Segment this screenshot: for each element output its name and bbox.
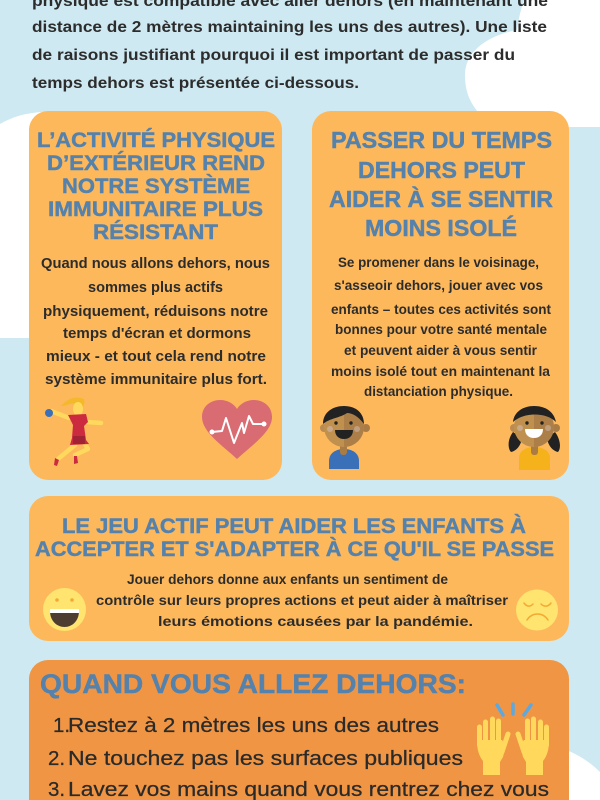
intro text: de raisons justifiant pourquoi il est important de passer du bbox=[32, 47, 515, 64]
heading: less isolated bbox=[329, 127, 553, 241]
intro text: temps dehors est présentée ci-dessous. bbox=[32, 75, 359, 92]
text: less isolated bbox=[331, 255, 551, 399]
panel: physical activity bbox=[29, 111, 282, 480]
list: outdoor rules: 1. bbox=[53, 714, 70, 737]
heading: physical activity bbox=[37, 127, 275, 244]
icon: raised hands bbox=[477, 704, 549, 775]
list: outdoor rules: 2. bbox=[48, 747, 65, 770]
heading: physical activity: NOTRE SYSTÈME bbox=[62, 173, 250, 198]
panel: less isolated bbox=[312, 111, 569, 480]
heading: active play: LE JEU ACTIF PEUT AIDER LES ENFANTS À bbox=[62, 515, 526, 538]
panel: active play bbox=[29, 496, 569, 641]
icon: handball player bbox=[45, 398, 101, 466]
intro text bbox=[32, 0, 548, 92]
heading: when you go outside: QUAND VOUS ALLEZ DEHORS: bbox=[40, 669, 466, 699]
text: physical activity: mieux - et tout cela rend notre bbox=[46, 349, 266, 365]
heading: active play bbox=[35, 515, 554, 561]
text: physical activity: temps d'écran et dormons bbox=[63, 326, 251, 342]
list: outdoor rules: Restez à 2 mètres les uns des autres bbox=[68, 714, 439, 737]
heading: physical activity: L’ACTIVITÉ PHYSIQUE bbox=[37, 127, 275, 152]
white blob: bottom right bbox=[560, 748, 600, 800]
white blob: left bbox=[0, 112, 42, 338]
heading: less isolated: PASSER DU TEMPS bbox=[331, 127, 552, 153]
list: outdoor rules: Ne touchez pas les surfaces publiques bbox=[68, 747, 463, 770]
icon: smiling face bbox=[43, 588, 86, 631]
white blob: top right bbox=[465, 0, 600, 127]
text: active play bbox=[96, 572, 509, 629]
heading: less isolated: AIDER À SE SENTIR bbox=[329, 185, 553, 212]
icon: heart with pulse bbox=[202, 400, 272, 459]
list: outdoor rules bbox=[48, 714, 549, 800]
heading: physical activity: RÉSISTANT bbox=[93, 219, 218, 244]
heading: physical activity: IMMUNITAIRE PLUS bbox=[48, 197, 263, 221]
text: active play: contrôle sur leurs propres actions et peut aider à maîtriser bbox=[96, 593, 509, 608]
heading: physical activity: D’EXTÉRIEUR REND bbox=[47, 150, 265, 175]
intro text: distance de 2 mètres maintaining les uns des autres). Une liste bbox=[32, 19, 547, 36]
text: physical activity: système immunitaire plus fort. bbox=[45, 372, 267, 388]
text: less isolated: distanciation physique. bbox=[364, 384, 513, 399]
heading: active play: ACCEPTER ET S'ADAPTER À CE QU'IL SE PASSE bbox=[35, 538, 554, 561]
icon: boy bbox=[320, 406, 370, 469]
text: less isolated: Se promener dans le voisinage, bbox=[338, 255, 539, 270]
heading: less isolated: MOINS ISOLÉ bbox=[365, 214, 517, 241]
text: physical activity: sommes plus actifs bbox=[88, 280, 223, 296]
text: active play: leurs émotions causées par la pandémie. bbox=[158, 614, 473, 629]
text: physical activity: physiquement, réduisons notre bbox=[43, 304, 268, 320]
panel: when you go outside bbox=[29, 660, 569, 800]
text: less isolated: et peuvent aider à vous sentir bbox=[344, 343, 538, 358]
text: active play: Jouer dehors donne aux enfants un sentiment de bbox=[127, 572, 448, 587]
text: less isolated: bonnes pour votre santé mentale bbox=[335, 322, 547, 337]
text: less isolated: enfants – toutes ces activités sont bbox=[331, 302, 551, 317]
icon: sad face bbox=[516, 590, 558, 630]
icon: girl bbox=[509, 406, 560, 470]
text: less isolated: s'asseoir dehors, jouer avec vos bbox=[334, 278, 543, 293]
heading: less isolated: DEHORS PEUT bbox=[358, 157, 525, 183]
text: physical activity bbox=[41, 256, 270, 388]
text: less isolated: moins isolé tout en maintenant la bbox=[331, 364, 551, 379]
text: physical activity: Quand nous allons dehors, nous bbox=[41, 256, 270, 272]
